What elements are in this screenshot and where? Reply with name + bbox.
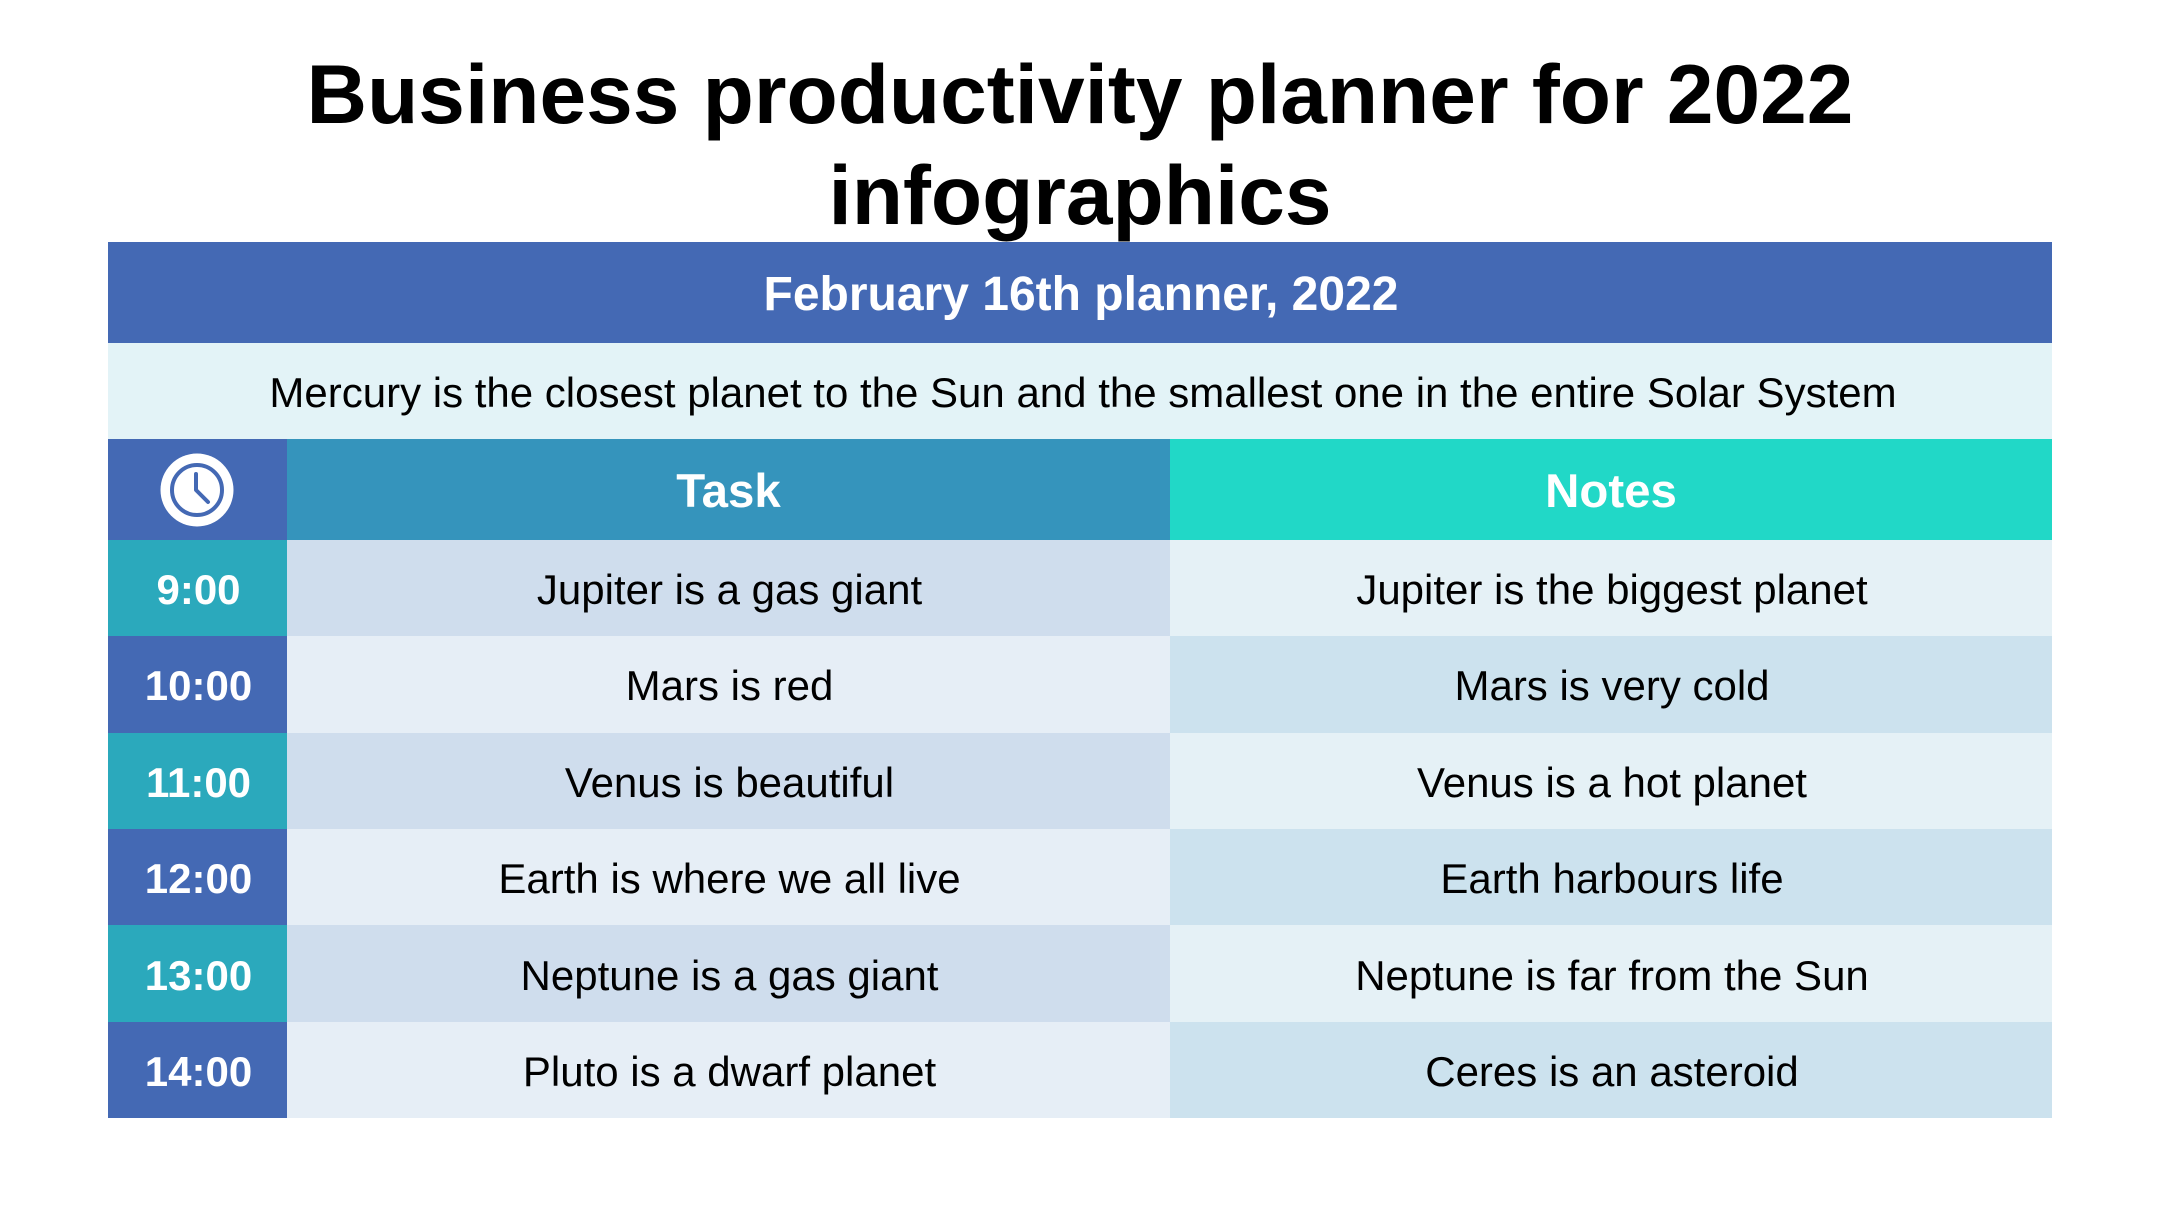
row 13:00: 13:00 bbox=[145, 952, 252, 999]
row 14:00: 14:00 bbox=[145, 1048, 252, 1094]
row 14:00: Ceres is an asteroid bbox=[1425, 1048, 1799, 1094]
row 9:00: 9:00 bbox=[156, 566, 241, 612]
row 11:00: 11:00 bbox=[146, 758, 251, 806]
description band bbox=[108, 343, 2052, 439]
title: Business productivity planner for 2022 bbox=[307, 47, 1853, 141]
row 14:00: Pluto is a dwarf planet bbox=[523, 1048, 936, 1094]
row 10:00 bbox=[108, 636, 2052, 733]
row 11:00: Venus is beautiful bbox=[565, 758, 894, 806]
header cell: Task bbox=[287, 439, 1170, 540]
row 11:00: Venus is a hot planet bbox=[1417, 758, 1807, 806]
description band: Mercury is the closest planet to the Sun and the smallest one in the entire Solar System bbox=[269, 368, 1897, 416]
row 10:00: Mars is red bbox=[626, 662, 833, 709]
row 9:00: Jupiter is the biggest planet bbox=[1356, 566, 1868, 612]
row 12:00: Earth is where we all live bbox=[498, 854, 961, 902]
row 12:00: 12:00 bbox=[145, 854, 252, 902]
row 10:00: Mars is very cold bbox=[1454, 662, 1770, 709]
header cell: Notes bbox=[1170, 439, 2052, 540]
header cell: Task: Task bbox=[676, 464, 781, 518]
title bbox=[307, 47, 1853, 242]
row 12:00 bbox=[108, 829, 2052, 925]
date banner: February 16th planner, 2022 bbox=[764, 268, 1398, 320]
header cell: Notes: Notes bbox=[1545, 464, 1677, 518]
header cell: clock icon bbox=[108, 439, 287, 540]
row 9:00 bbox=[108, 540, 2052, 636]
row 12:00: Earth harbours life bbox=[1440, 854, 1784, 902]
row 13:00 bbox=[108, 925, 2052, 1022]
row 13:00: Neptune is far from the Sun bbox=[1355, 952, 1869, 999]
row 14:00 bbox=[108, 1022, 2052, 1118]
title: infographics bbox=[828, 148, 1332, 242]
row 9:00: Jupiter is a gas giant bbox=[537, 566, 922, 612]
row 13:00: Neptune is a gas giant bbox=[521, 952, 938, 999]
row 10:00: 10:00 bbox=[145, 662, 252, 709]
date banner bbox=[108, 242, 2052, 343]
panel: planner table bbox=[108, 242, 2052, 1118]
row 11:00 bbox=[108, 733, 2052, 829]
